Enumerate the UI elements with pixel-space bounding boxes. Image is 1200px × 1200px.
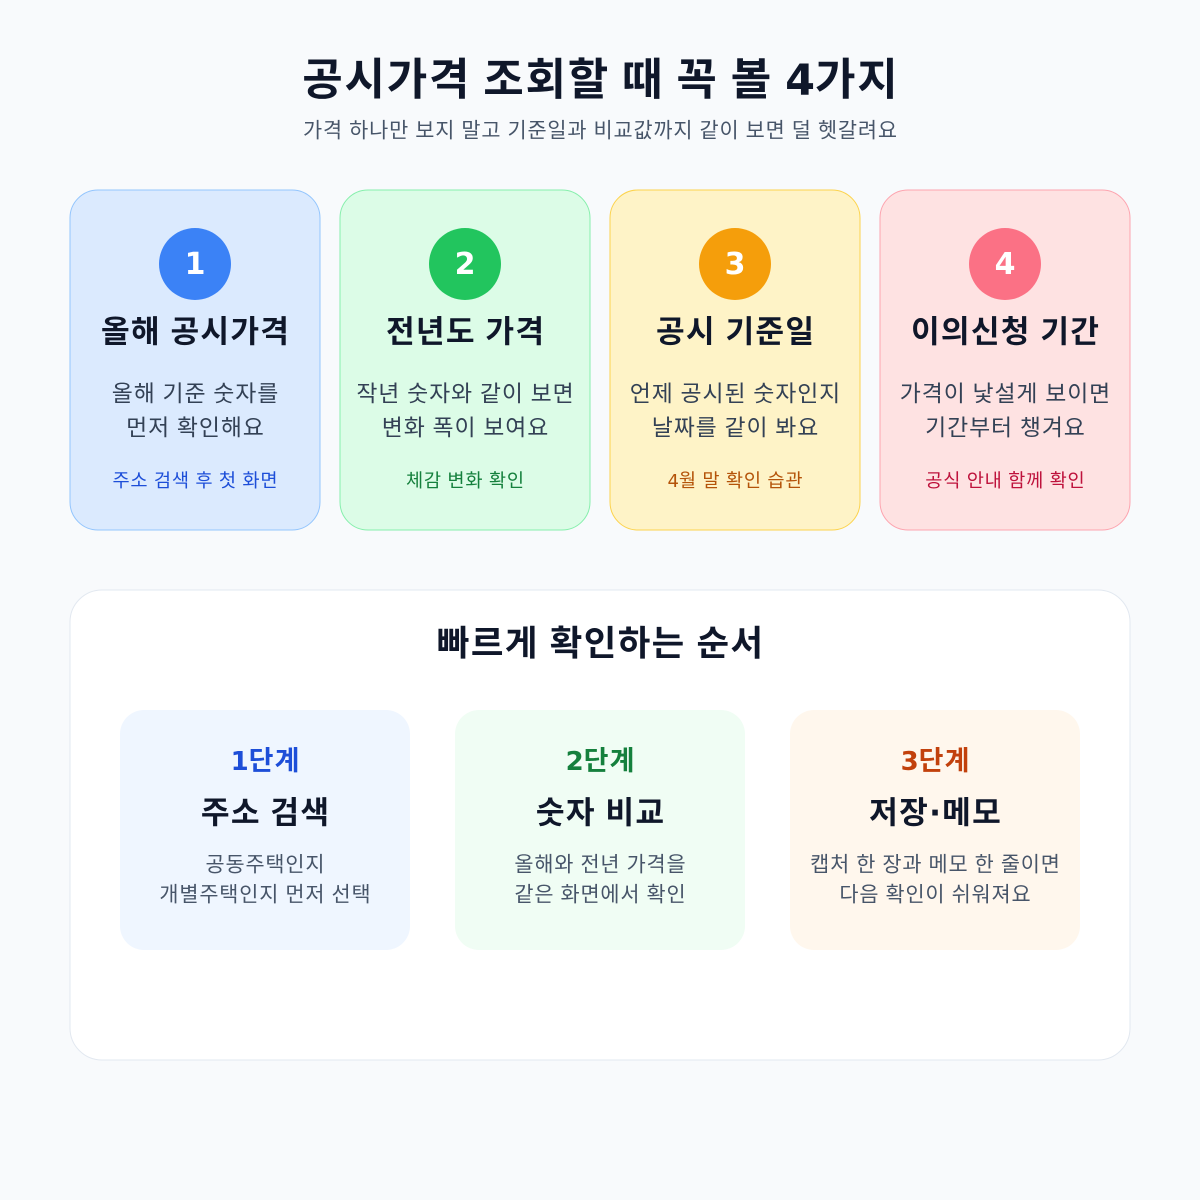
icon: number badge 3: 3 bbox=[725, 247, 745, 282]
step 1 description: 공동주택인지 bbox=[206, 852, 325, 876]
card 2 description: 작년 숫자와 같이 보면 bbox=[356, 382, 575, 408]
card 4 heading: 이의신청 기간 bbox=[911, 314, 1100, 350]
card 2 description bbox=[356, 382, 575, 442]
card 3 description: 날짜를 같이 봐요 bbox=[652, 416, 819, 442]
icon: number badge 4 bbox=[969, 228, 1041, 300]
card 2 note: 체감 변화 확인 bbox=[406, 471, 525, 492]
card 3 description bbox=[630, 382, 841, 442]
step 2 panel bbox=[455, 710, 745, 950]
card 2 heading: 전년도 가격 bbox=[386, 314, 545, 350]
card 1 description bbox=[112, 382, 279, 442]
icon: number badge 3 bbox=[699, 228, 771, 300]
card 1 heading: 올해 공시가격 bbox=[101, 314, 290, 350]
panel: card 1 올해 공시가격 bbox=[70, 190, 320, 530]
icon: number badge 1 bbox=[159, 228, 231, 300]
step 3 label: 3단계 bbox=[901, 746, 971, 777]
panel: card 4 이의신청 기간 bbox=[880, 190, 1130, 530]
step 1 panel bbox=[120, 710, 410, 950]
step 2 label: 2단계 bbox=[566, 746, 636, 777]
card 4 description: 가격이 낯설게 보이면 bbox=[900, 382, 1111, 408]
step 2 description: 같은 화면에서 확인 bbox=[514, 882, 686, 906]
panel: card 2 전년도 가격 bbox=[340, 190, 590, 530]
title: 공시가격 조회할 때 꼭 볼 4가지 bbox=[302, 54, 899, 106]
step 1 heading: 주소 검색 bbox=[201, 796, 330, 832]
card 3 note: 4월 말 확인 습관 bbox=[667, 471, 803, 492]
step 3 description: 캡처 한 장과 메모 한 줄이면 bbox=[810, 852, 1061, 876]
card 4 note: 공식 안내 함께 확인 bbox=[925, 471, 1085, 492]
step 3 heading: 저장·메모 bbox=[869, 796, 1002, 832]
step 3 description: 다음 확인이 쉬워져요 bbox=[839, 882, 1031, 906]
step 1 description: 개별주택인지 먼저 선택 bbox=[159, 882, 371, 906]
icon: number badge 4: 4 bbox=[995, 247, 1015, 282]
card 2 description: 변화 폭이 보여요 bbox=[382, 416, 549, 442]
card 3 heading: 공시 기준일 bbox=[656, 314, 815, 350]
step 1 description bbox=[159, 852, 371, 906]
card 1 description: 올해 기준 숫자를 bbox=[112, 382, 279, 408]
section heading: 빠르게 확인하는 순서 bbox=[437, 624, 765, 664]
card 1 description: 먼저 확인해요 bbox=[126, 416, 265, 442]
icon: number badge 1: 1 bbox=[185, 247, 205, 282]
card 4 description bbox=[900, 382, 1111, 442]
step 3 panel bbox=[790, 710, 1080, 950]
step 3 description bbox=[810, 852, 1061, 906]
step 2 description: 올해와 전년 가격을 bbox=[514, 852, 686, 876]
icon: number badge 2: 2 bbox=[455, 247, 475, 282]
step 2 heading: 숫자 비교 bbox=[536, 796, 665, 832]
panel: quick check order bbox=[70, 590, 1130, 1060]
panel: card 3 공시 기준일 bbox=[610, 190, 860, 530]
subtitle: 가격 하나만 보지 말고 기준일과 비교값까지 같이 보면 덜 헷갈려요 bbox=[303, 118, 898, 142]
step 2 description bbox=[514, 852, 686, 906]
icon: number badge 2 bbox=[429, 228, 501, 300]
card 3 description: 언제 공시된 숫자인지 bbox=[630, 382, 841, 408]
card 4 description: 기간부터 챙겨요 bbox=[925, 416, 1086, 442]
step 1 label: 1단계 bbox=[231, 746, 301, 777]
card 1 note: 주소 검색 후 첫 화면 bbox=[112, 471, 278, 492]
